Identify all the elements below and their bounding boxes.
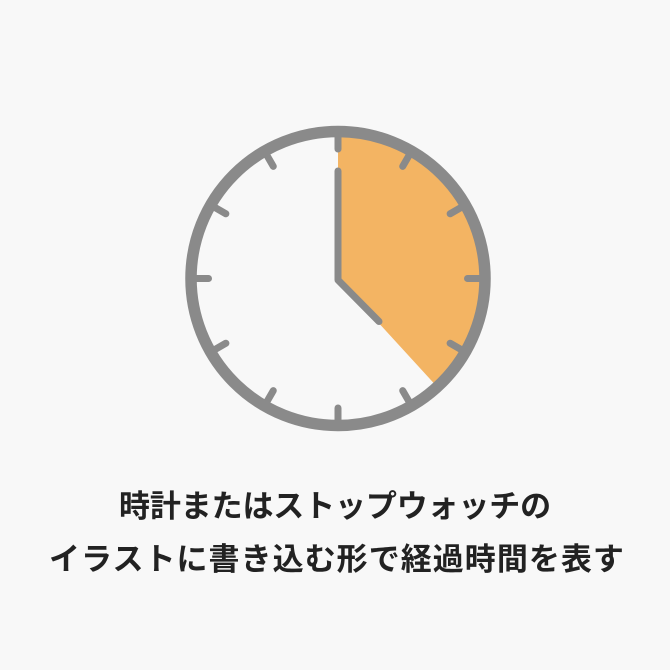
elapsed time sector: [338, 131, 485, 387]
clock face: [191, 132, 485, 426]
caption text: 時計またはストップウォッチの: [119, 489, 551, 524]
caption text: イラストに書き込む形で経過時間を表す: [49, 542, 625, 577]
clock hands: [338, 171, 379, 322]
clock rim: [191, 132, 485, 426]
hour ticks: [194, 135, 482, 422]
caption text: [49, 489, 625, 577]
